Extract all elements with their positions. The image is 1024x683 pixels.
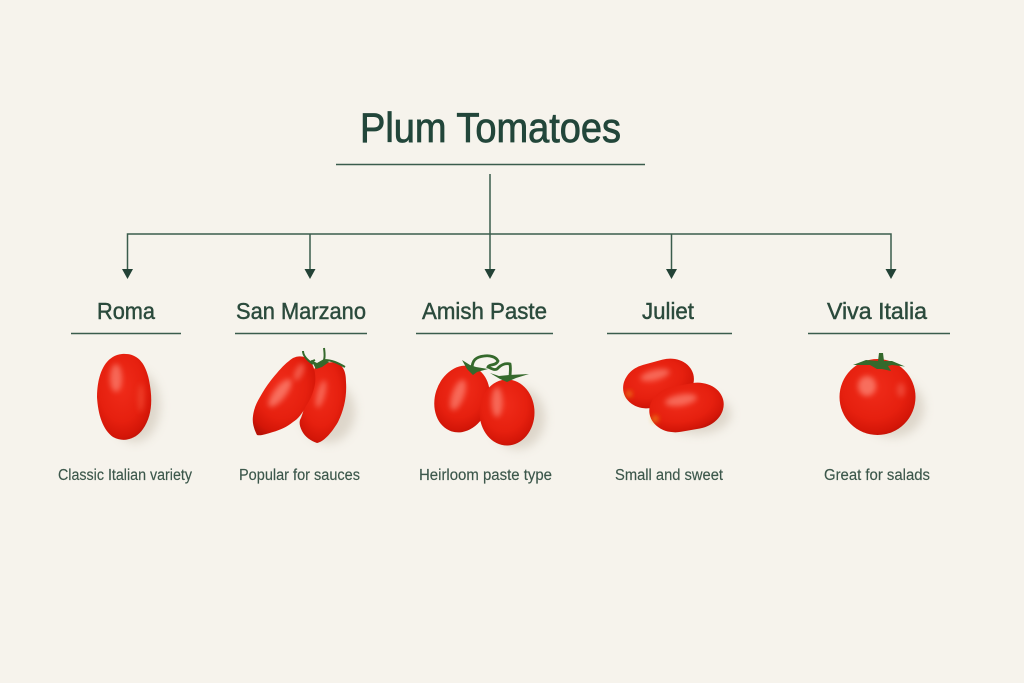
arrow: San Marzano	[304, 269, 316, 279]
icon: Amish Paste tomatoes	[426, 356, 545, 449]
underline: Roma	[71, 332, 181, 334]
heading: Viva Italia: Viva Italia	[827, 298, 927, 324]
icon: Viva Italia tomato	[840, 353, 924, 437]
panel: Roma	[58, 298, 192, 484]
heading: Juliet: Juliet	[642, 298, 695, 324]
underline: San Marzano	[235, 332, 367, 334]
heading: San Marzano: San Marzano	[236, 298, 366, 324]
caption: Roma: Classic Italian variety	[58, 467, 192, 484]
icon: Juliet tomatoes	[618, 353, 731, 437]
heading: Amish Paste: Amish Paste	[422, 298, 547, 324]
caption: Amish Paste: Heirloom paste type	[419, 467, 552, 484]
arrow: Roma	[122, 269, 133, 279]
panel: Viva Italia	[808, 298, 950, 484]
caption: Viva Italia: Great for salads	[824, 467, 930, 484]
panel: Juliet	[607, 298, 732, 484]
caption: San Marzano: Popular for sauces	[239, 467, 360, 484]
panel: San Marzano	[235, 298, 367, 484]
icon: Roma tomato	[97, 354, 160, 442]
title underline	[336, 164, 645, 166]
heading: Roma: Roma	[97, 298, 155, 324]
arrow: Viva Italia	[886, 269, 896, 279]
icon: San Marzano tomatoes	[253, 348, 355, 443]
underline: Amish Paste	[416, 332, 553, 334]
arrow: Juliet	[666, 269, 677, 279]
tree connector with arrows	[122, 174, 896, 279]
panel: Amish Paste	[416, 298, 553, 484]
caption: Juliet: Small and sweet	[615, 467, 724, 484]
arrow: Amish Paste	[484, 269, 496, 279]
underline: Juliet	[607, 332, 732, 334]
underline: Viva Italia	[808, 332, 950, 334]
title: Plum Tomatoes	[360, 104, 621, 151]
